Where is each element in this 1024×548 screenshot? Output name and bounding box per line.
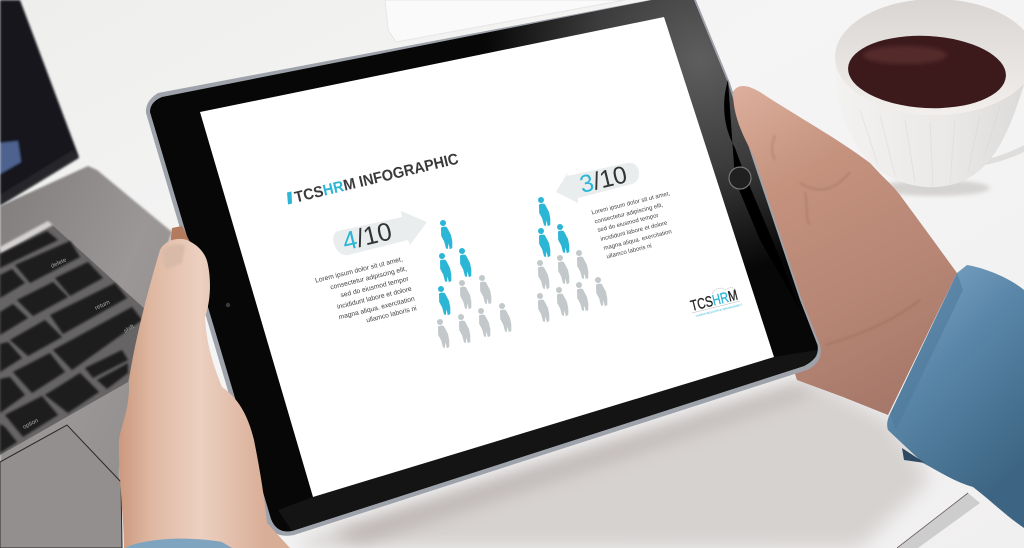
callout: 4/10 arrow: 4/10 (340, 218, 395, 256)
laptop (0, 0, 172, 548)
key labels: delete (50, 257, 68, 270)
callout: 4/10 arrow (333, 211, 427, 256)
paper on desk (385, 0, 625, 42)
text block: left description: sed do eiusmod tempor (340, 275, 410, 299)
shirt sleeve (887, 265, 1024, 528)
cup ribs (860, 105, 1000, 186)
coffee (846, 32, 1008, 112)
title accent bar (287, 192, 292, 204)
camera (226, 303, 230, 307)
right palm behind tablet (750, 140, 957, 415)
keyboard well (0, 223, 146, 455)
left hand (119, 226, 290, 548)
callout: 3/10 arrow: 3/10 (577, 161, 630, 199)
text block: right description: consectetur adipiscing elit, (594, 203, 664, 225)
laptop base (0, 166, 172, 548)
black reflection near thumb (724, 80, 800, 310)
tablet shadow (300, 378, 930, 548)
callout: 3/10 arrow (556, 161, 639, 203)
key labels: shift (123, 324, 136, 335)
hand creases (772, 135, 920, 345)
tablet bezel (150, 0, 818, 532)
trackpad (0, 425, 122, 548)
cup rim (835, 0, 1024, 115)
key labels: option (22, 418, 39, 431)
text block: left description: ullamco laboris ni (366, 305, 418, 324)
key labels: return (94, 300, 111, 312)
text block: left description (315, 256, 418, 324)
key labels (22, 257, 136, 431)
text block: left description: magna aliqua. exercitation (338, 296, 416, 321)
coffee cup (835, 0, 1024, 196)
right finger (733, 86, 920, 345)
tablet silver frame (146, 0, 821, 536)
text block: right description: ullamco laboris ni (606, 243, 652, 260)
text block: left description: consectetur adipiscing elit, (330, 266, 408, 291)
cup body (835, 20, 1024, 187)
tablet screen (200, 17, 774, 497)
text block: right description: magna aliqua. exercitation (603, 229, 672, 252)
text block: left description: Lorem ipsum dolor sit ut amet, (315, 256, 404, 285)
left cuff (125, 539, 232, 548)
cup shadow (880, 180, 990, 196)
text block: left description: incididunt labore et dolore (336, 286, 413, 311)
home button (729, 167, 751, 189)
pictogram: 3 of 10 people (537, 197, 607, 322)
thumbnail (162, 244, 185, 270)
logo: TCSHRM: TCSHRM (689, 287, 740, 315)
cup handle (985, 145, 1024, 165)
laptop screen (0, 0, 79, 206)
keyboard keys (0, 231, 142, 453)
text block: right description: Lorem ipsum dolor sit ut amet, (591, 191, 671, 216)
text block: right description: sed do eiusmod tempor (597, 213, 659, 234)
tablet contact shadow (330, 385, 810, 542)
logo: TCSHRM: HUMAN RESOURCE MANAGEMENT (695, 302, 743, 318)
title: TCSHRM INFOGRAPHIC (293, 151, 460, 206)
pictogram: 4 of 10 people (437, 220, 511, 348)
text block: right description: incididunt labore et dolore (600, 220, 669, 243)
tablet (146, 0, 821, 536)
silver pen (897, 493, 980, 548)
text block: right description (591, 191, 672, 260)
bottom bezel (278, 350, 817, 531)
